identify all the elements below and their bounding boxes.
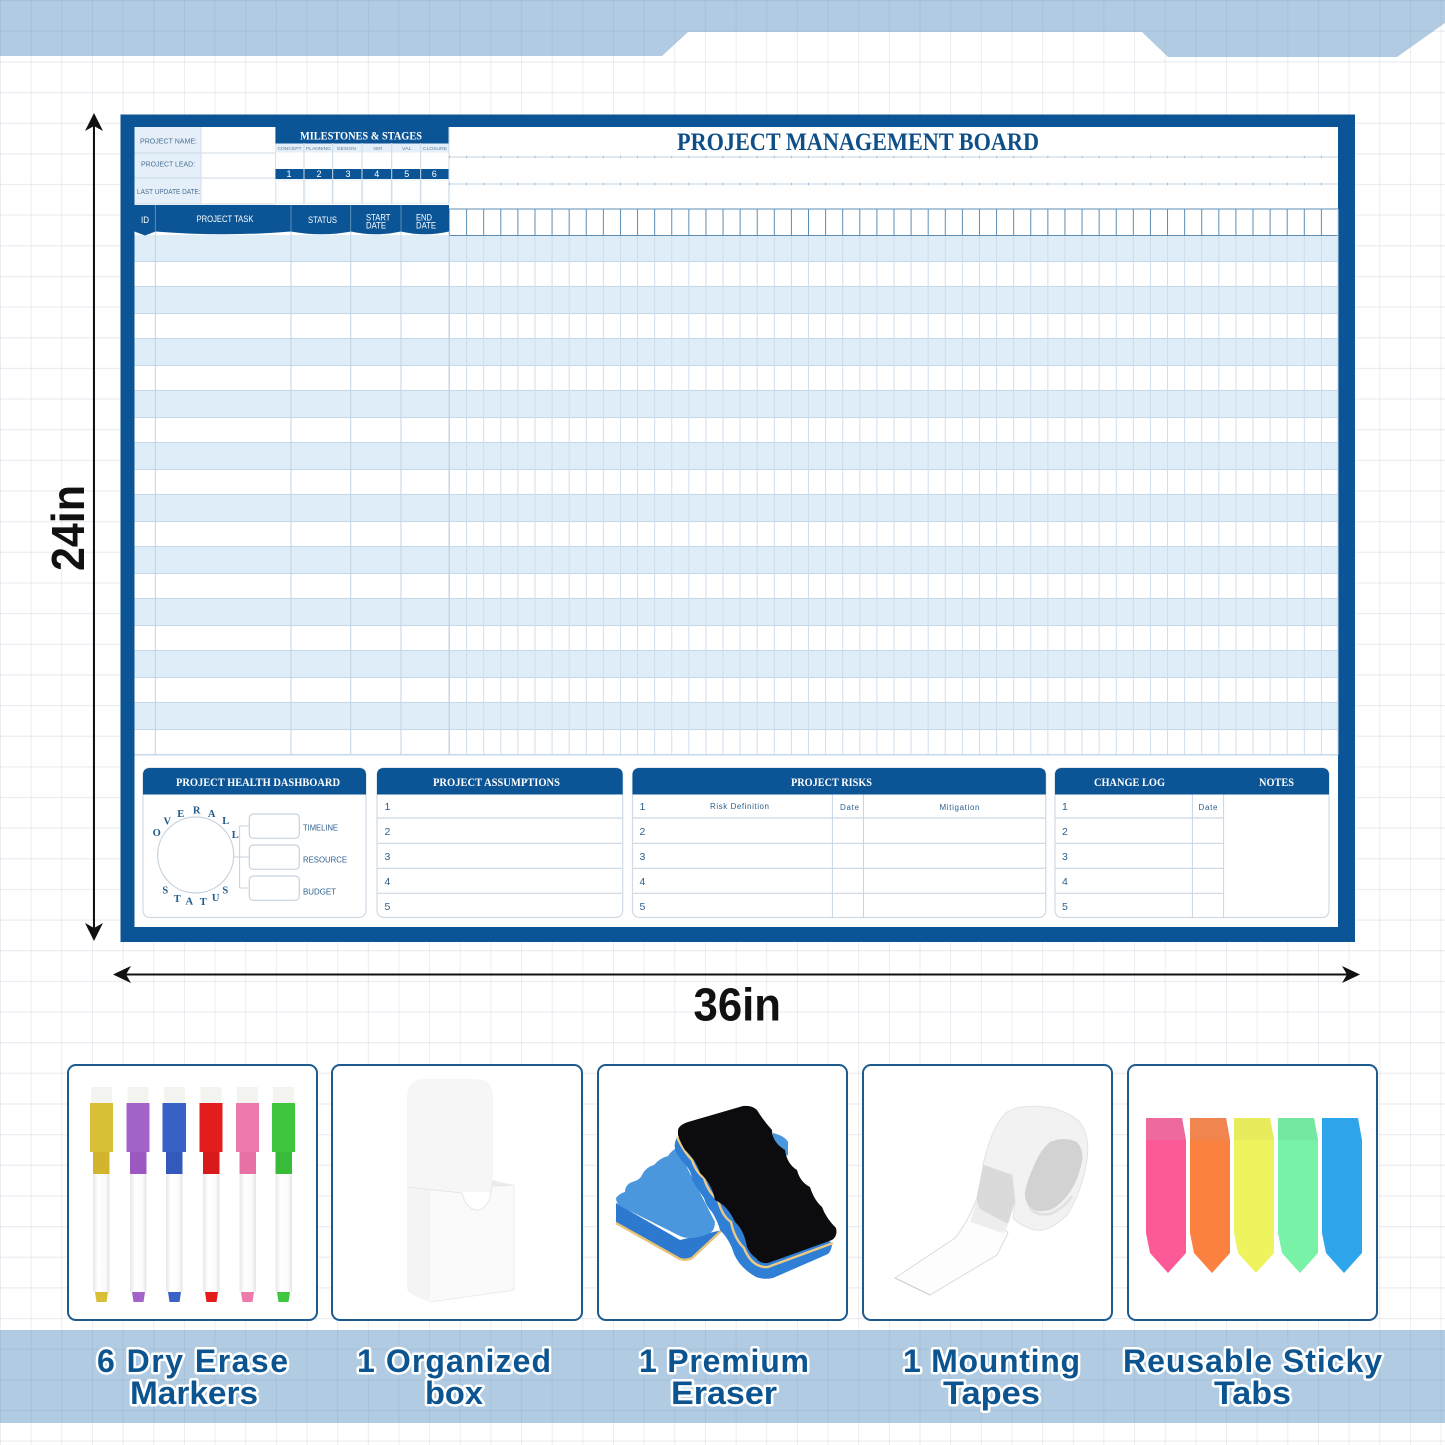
panel: markers xyxy=(68,1065,317,1320)
icon: pink marker xyxy=(236,1087,259,1302)
project info block xyxy=(134,127,276,204)
top header band xyxy=(0,0,1445,57)
task table header: DATE xyxy=(366,220,386,230)
overall status ring letters: V xyxy=(164,816,172,828)
task table header: END xyxy=(416,212,432,222)
icon: tape roll xyxy=(895,1106,1088,1295)
task table header: START xyxy=(366,212,391,222)
panel: change log and notes: 1 xyxy=(1062,801,1068,813)
overall status ring letters: L xyxy=(232,830,239,841)
icon: orange tab xyxy=(1190,1118,1230,1273)
panel: project health dashboard: RESOURCE xyxy=(303,856,347,864)
panel: project assumptions xyxy=(377,768,623,918)
icon: purple marker xyxy=(126,1087,150,1302)
panel: change log and notes: CHANGE LOG xyxy=(1094,777,1165,789)
panel: project health dashboard xyxy=(143,768,366,918)
panel: project risks: 5 xyxy=(640,901,646,913)
overall status ring letters: A xyxy=(186,896,194,908)
panel: eraser xyxy=(598,1065,847,1320)
board title xyxy=(449,129,1338,184)
overall status ring letters: T xyxy=(174,894,181,905)
panel: change log and notes: 5 xyxy=(1062,901,1068,913)
panel: project assumptions: 5 xyxy=(384,901,390,913)
panel: change log and notes: Date xyxy=(1198,803,1218,812)
icon: whiteboard erasers xyxy=(616,1106,836,1279)
milestones and stages: 6 xyxy=(432,169,437,179)
panel: project assumptions: PROJECT ASSUMPTIONS xyxy=(433,777,560,789)
panel: project assumptions: 3 xyxy=(384,851,390,863)
caption: eraser: 1 Premium xyxy=(639,1343,809,1379)
milestones and stages: VER xyxy=(373,146,383,151)
task table header xyxy=(134,205,449,236)
panel: change log and notes: 3 xyxy=(1062,851,1068,863)
task table header: DATE xyxy=(416,220,436,230)
panel: change log and notes: 4 xyxy=(1062,876,1068,888)
dimension label: 24in: 24in xyxy=(42,485,94,571)
panel: project assumptions: 1 xyxy=(384,801,390,813)
panel: project risks: 1 xyxy=(640,801,646,813)
caption: sticky tabs: Reusable Sticky xyxy=(1123,1343,1382,1379)
milestones and stages: CONCEPT xyxy=(278,146,302,151)
project info block: PROJECT LEAD: xyxy=(141,162,195,168)
milestones and stages xyxy=(276,127,449,204)
overall status ring letters: A xyxy=(208,809,216,820)
milestones and stages: VAL xyxy=(402,146,412,151)
panel: project risks: 3 xyxy=(640,851,646,863)
milestones and stages: PLANNING xyxy=(306,146,331,151)
overall status ring letters: O xyxy=(153,828,161,839)
milestones and stages: 4 xyxy=(374,169,379,179)
panel: project health dashboard: TIMELINE xyxy=(303,824,338,832)
board title: PROJECT MANAGEMENT BOARD xyxy=(677,129,1039,156)
milestones and stages: 2 xyxy=(316,169,322,179)
icon: pink tab xyxy=(1146,1118,1186,1273)
panel: project risks: PROJECT RISKS xyxy=(791,777,872,789)
icon: marker box xyxy=(407,1079,514,1302)
status circle xyxy=(158,817,234,893)
milestones and stages: 5 xyxy=(404,169,409,179)
caption: mounting tapes: Tapes xyxy=(943,1375,1040,1411)
project info block: PROJECT NAME: xyxy=(140,138,197,146)
icon: yellow marker xyxy=(90,1087,113,1302)
bottom caption band xyxy=(0,1330,1445,1423)
panel: project risks: Mitigation xyxy=(940,803,980,812)
panel: organizer box xyxy=(332,1065,582,1320)
caption: mounting tapes xyxy=(903,1343,1080,1411)
overall status ring letters: U xyxy=(212,893,220,904)
caption: markers xyxy=(97,1343,288,1411)
caption: mounting tapes: 1 Mounting xyxy=(903,1343,1080,1379)
milestones and stages: 1 xyxy=(286,169,292,179)
milestones and stages: 3 xyxy=(345,169,351,179)
caption: sticky tabs xyxy=(1123,1343,1382,1411)
panel: mounting tape xyxy=(863,1065,1112,1320)
overall status ring letters: L xyxy=(222,816,229,827)
overall status ring letters: R xyxy=(193,806,201,816)
panel: project risks: Risk Definition xyxy=(710,802,769,811)
project info block: LAST UPDATE DATE: xyxy=(137,189,201,196)
panel: project health dashboard: PROJECT HEALTH DASHBOARD xyxy=(176,777,340,789)
arrow: board height xyxy=(85,113,103,941)
caption: organized box xyxy=(357,1343,551,1411)
caption: markers: Markers xyxy=(130,1375,258,1411)
gantt grid xyxy=(134,209,1338,755)
caption: eraser xyxy=(639,1343,809,1411)
panel: project assumptions: 2 xyxy=(384,826,390,838)
icon: green marker xyxy=(272,1087,295,1302)
panel: project risks: Date xyxy=(840,803,860,812)
panel: project risks: 2 xyxy=(640,826,646,838)
panel: project assumptions: 4 xyxy=(384,876,390,888)
dimension label: 36in: 36in xyxy=(694,978,781,1030)
icon: blue tab xyxy=(1322,1118,1362,1273)
caption: markers: 6 Dry Erase xyxy=(97,1343,288,1379)
overall status ring letters: S xyxy=(222,886,228,896)
milestones and stages: DESIGN xyxy=(337,146,356,151)
icon: yellow tab xyxy=(1234,1118,1274,1273)
panel: project health dashboard: BUDGET xyxy=(303,888,336,896)
panel: change log and notes: NOTES xyxy=(1259,777,1294,789)
overall status ring letters xyxy=(153,806,239,908)
icon: red marker xyxy=(200,1087,222,1302)
whiteboard xyxy=(120,114,1355,942)
caption: sticky tabs: Tabs xyxy=(1214,1375,1291,1411)
milestones and stages: MILESTONES & STAGES xyxy=(300,130,422,142)
task table header: PROJECT TASK xyxy=(196,214,254,224)
overall status ring letters: T xyxy=(200,897,207,908)
panel: change log and notes: 2 xyxy=(1062,826,1068,838)
panel: project risks: 4 xyxy=(640,876,646,888)
arrow: board width xyxy=(113,966,1360,983)
panel: project risks xyxy=(632,768,1046,918)
panel: sticky tabs xyxy=(1128,1065,1377,1320)
icon: blue marker xyxy=(162,1087,186,1302)
overall status ring letters: S xyxy=(162,886,168,896)
caption: organized box: box xyxy=(425,1375,483,1411)
overall status ring letters: E xyxy=(177,809,184,820)
task table header: STATUS xyxy=(308,215,337,225)
milestones and stages: CLOSURE xyxy=(423,146,447,151)
icon: green tab xyxy=(1278,1118,1318,1273)
caption: organized box: 1 Organized xyxy=(357,1343,551,1379)
caption: eraser: Eraser xyxy=(671,1375,777,1411)
panel: change log and notes xyxy=(1055,768,1329,918)
task table header: ID xyxy=(141,215,149,225)
